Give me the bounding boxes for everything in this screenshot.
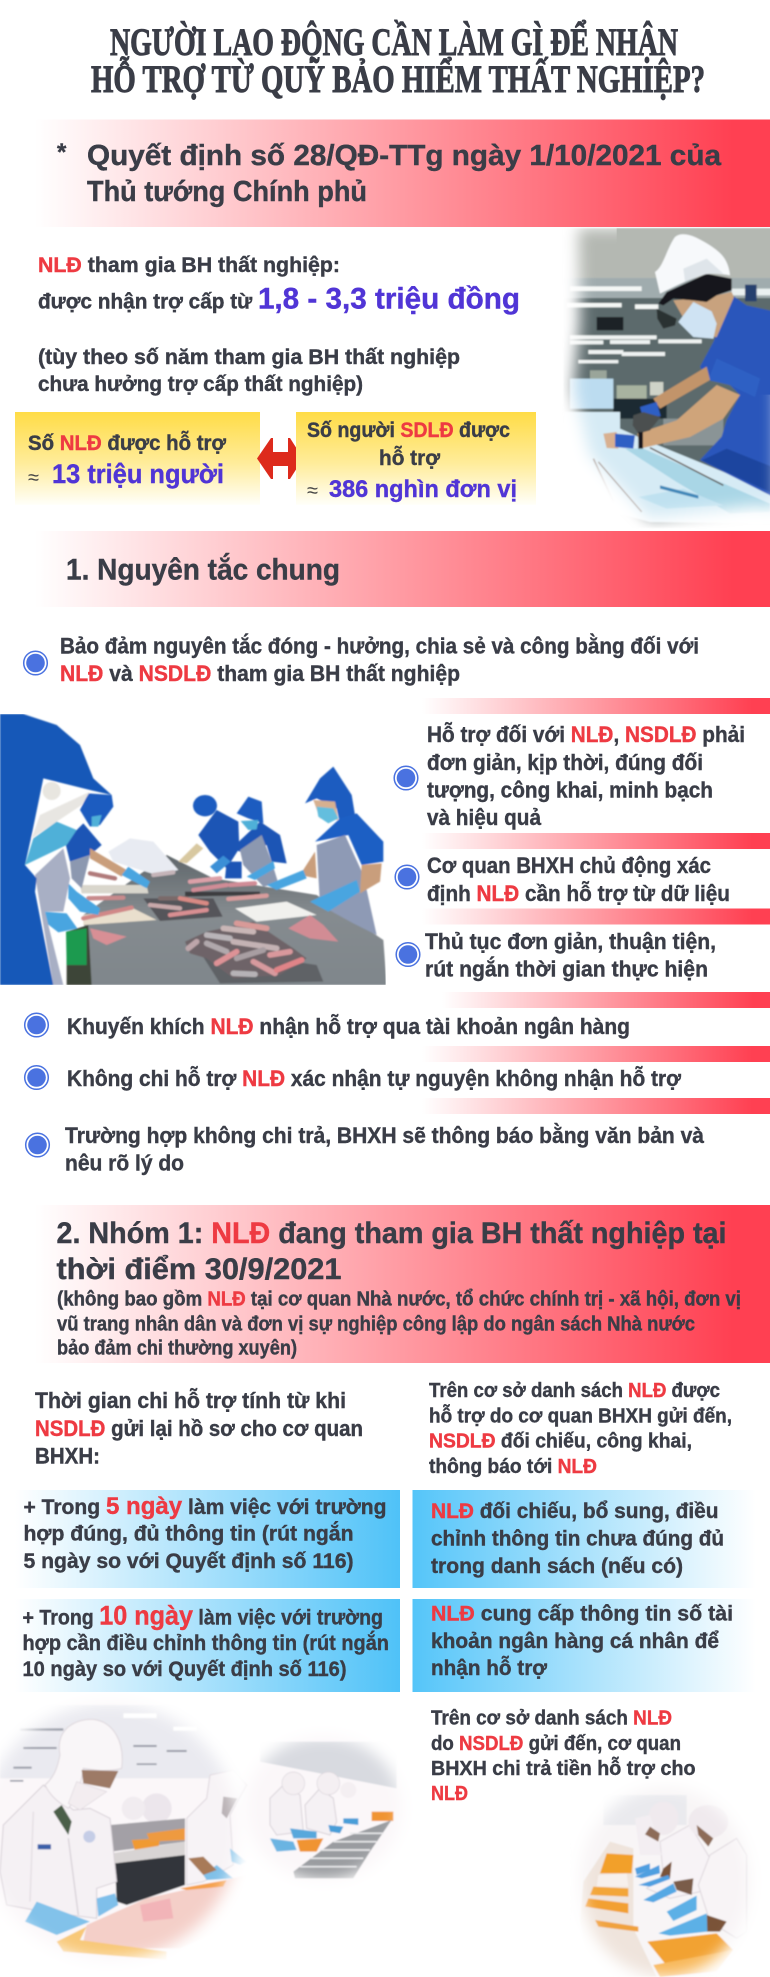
panel: provide bank account: NLĐ cung cấp thông tin số tài (431, 1602, 733, 1626)
list item: support must be simple: Hỗ trợ đối với NLĐ, NSDLĐ phải (427, 722, 745, 747)
list item: simple procedures: rút ngắn thời gian thực hiện (425, 956, 708, 982)
sub: hair and face (673, 292, 734, 337)
divider band (422, 908, 770, 924)
panel: provide bank account: nhận hỗ trợ (431, 1656, 547, 1680)
list item: support must be simple: và hiệu quả (427, 805, 542, 830)
text block: payment time: BHXH: (35, 1444, 100, 1468)
panel: within 10 days (15, 1599, 400, 1692)
panel: provide bank account (412, 1599, 756, 1692)
panel: decision heading band: Quyết định số 28/QĐ-TTg ngày 1/10/2021 của (87, 140, 722, 172)
text block: list sent by agency: NSDLĐ đối chiếu, công khai, (429, 1430, 692, 1452)
list item: social insurance agency (395, 853, 730, 906)
text block: NLD allowance: chưa hưởng trợ cấp thất nghiệp) (38, 373, 363, 396)
text block: agency pays: BHXH chi trả tiền hỗ trợ cho (431, 1756, 696, 1780)
sub: right workers (270, 1785, 303, 1835)
panel: section 2 heading band: bảo đảm chi thường xuyên) (57, 1338, 297, 1360)
photo: packing line workers (581, 1776, 748, 1977)
text block: agency pays: NLĐ (431, 1783, 468, 1805)
callout: number of workers supported: Số NLĐ được hỗ trợ (28, 431, 226, 455)
panel: section 2 heading band: (không bao gồm NLĐ tại cơ quan Nhà nước, tổ chức chính trị - xã hội, đơn vị (57, 1288, 741, 1310)
text block: NLD allowance: (tùy theo số năm tham gia BH thất nghiệp (38, 346, 460, 369)
text block: list sent by agency: Trên cơ sở danh sách NLĐ được (429, 1380, 720, 1402)
panel: within 5 days: hợp đúng, đủ thông tin (rút ngắn (24, 1522, 354, 1546)
text block: NLD allowance: NLĐ tham gia BH thất nghiệp: (38, 254, 340, 277)
callout: number of workers supported: 13 triệu người (52, 459, 224, 489)
photo: fish processing workers (0, 714, 387, 985)
text block: payment time: NSDLĐ gửi lại hồ sơ cho cơ quan (35, 1416, 363, 1441)
sub: main worker (0, 1785, 117, 1918)
list item: bank account: Khuyến khích NLĐ nhận hỗ trợ qua tài khoản ngân hàng (67, 1014, 630, 1039)
panel: decision heading band (35, 120, 770, 227)
sub: fish tray (83, 1875, 247, 1948)
list item: principle 1: NLĐ và NSDLĐ tham gia BH thất nghiệp (60, 661, 460, 686)
panel: within 5 days: + Trong 5 ngày làm việc với trường (24, 1493, 386, 1520)
list item: support must be simple: đơn giản, kịp thời, đúng đối (427, 750, 703, 775)
panel: section 1 heading band (35, 531, 770, 607)
list item: principle 1 (24, 634, 699, 686)
text block: payment time: Thời gian chi hỗ trợ tính từ khi (35, 1388, 346, 1413)
panel: section 2 heading band: vũ trang nhân dân và đơn vị sự nghiệp công lập do ngân sách Nhà nước (57, 1314, 695, 1336)
sub: worker 5 (305, 767, 355, 823)
callout: number of employers supported: hỗ trợ (379, 446, 440, 470)
text block: agency pays (431, 1708, 696, 1805)
callout: number of employers supported (296, 412, 536, 505)
sub: front orange basket (647, 1933, 733, 1966)
list item: principle 1: Bảo đảm nguyên tắc đóng - hưởng, chia sẻ và công bằng đối với (60, 634, 699, 658)
photo: seafood factory workers in white (0, 1705, 397, 1959)
sub: worker 3 (193, 795, 217, 816)
list item: social insurance agency: định NLĐ cần hỗ trợ từ dữ liệu (427, 881, 730, 906)
list item: simple procedures: Thủ tục đơn giản, thuận tiện, (425, 929, 716, 954)
divider band (422, 1046, 770, 1062)
panel: compare and adjust (412, 1490, 756, 1588)
callout: number of employers supported: ≈ (307, 480, 318, 502)
divider band (422, 698, 770, 714)
panel: decision heading band: * (57, 139, 67, 166)
callout: number of workers supported: ≈ (28, 467, 39, 489)
sub: blue gloves (635, 1863, 650, 1875)
panel: section 2 heading band (35, 1205, 770, 1363)
list item: support must be simple: tượng, công khai, minh bạch (427, 778, 713, 802)
panel: provide bank account: khoản ngân hàng cá nhân để (431, 1630, 719, 1653)
panel: compare and adjust: NLĐ đối chiếu, bổ sung, điều (431, 1500, 718, 1523)
sub: arms (653, 367, 710, 409)
divider band (422, 1098, 770, 1114)
list item: written notice: Trường hợp không chi trả, BHXH sẽ thông báo bằng văn bản và (65, 1123, 705, 1148)
sub: cutting table (563, 412, 770, 524)
photo: garment worker (563, 228, 770, 528)
sub: fish piles (185, 922, 307, 978)
text block: agency pays: Trên cơ sở danh sách NLĐ (431, 1708, 672, 1730)
panel: compare and adjust: chỉnh thông tin chưa đúng đủ (431, 1528, 724, 1550)
text block: payment time (35, 1388, 363, 1468)
text block: NLD allowance (38, 254, 520, 396)
list item: written notice (26, 1123, 705, 1176)
sub: work table (83, 855, 387, 985)
text block: list sent by agency (429, 1380, 732, 1478)
panel: within 10 days: 10 ngày so với Quyết định số 116) (22, 1658, 346, 1681)
list item: written notice: nêu rõ lý do (65, 1150, 184, 1176)
panel: section 1 heading band: 1. Nguyên tắc chung (66, 552, 340, 586)
panel: section 2 heading band: 2. Nhóm 1: NLĐ đang tham gia BH thất nghiệp tại (56, 1217, 726, 1250)
panel: compare and adjust: trong danh sách (nếu có) (431, 1555, 683, 1578)
sub: dark machine (115, 1855, 185, 1905)
sub: ceiling (0, 1705, 240, 1778)
list item: voluntary refusal: Không chi hỗ trợ NLĐ xác nhận tự nguyện không nhận hỗ trợ (67, 1066, 681, 1091)
text block: NLD allowance: được nhận trợ cấp từ 1,8 - 3,3 triệu đồng (38, 282, 520, 316)
panel: within 5 days (15, 1490, 400, 1588)
title (91, 18, 705, 101)
sub: worker 2 (80, 793, 113, 827)
callout: number of employers supported: 386 nghìn đơn vị (329, 476, 517, 503)
text block: list sent by agency: hỗ trợ do cơ quan BHXH gửi đến, (429, 1404, 732, 1428)
sub: conveyor (293, 1820, 392, 1878)
divider band (422, 833, 770, 849)
panel: within 10 days: hợp cần điều chỉnh thông tin (rút ngắn (22, 1631, 389, 1655)
sub: hat (655, 234, 730, 294)
sub: workers (647, 1825, 710, 1898)
list item: simple procedures (396, 929, 716, 982)
panel: decision heading band: Thủ tướng Chính phủ (87, 176, 367, 208)
text block: list sent by agency: thông báo tới NLĐ (429, 1456, 597, 1478)
sub: second worker (186, 1774, 236, 1886)
panel: section 2 heading band: thời điểm 30/9/2021 (56, 1253, 342, 1286)
sub: shirt (700, 296, 770, 499)
sub: foreground worker (35, 848, 70, 985)
list item: social insurance agency: Cơ quan BHXH chủ động xác (427, 853, 711, 878)
sub: far line of workers (144, 1794, 172, 1822)
divider band (442, 992, 770, 1008)
sub: worker 4 (237, 797, 263, 823)
callout: number of employers supported: Số người SDLĐ được (307, 419, 510, 442)
sub: counter (580, 1842, 657, 1977)
list item: support must be simple (394, 722, 745, 830)
callout: number of workers supported (15, 412, 260, 505)
panel: within 5 days: 5 ngày so với Quyết định số 116) (24, 1550, 354, 1573)
sub: orange trays (600, 1853, 633, 1873)
sub: face mask (678, 302, 717, 339)
text block: agency pays: do NSDLĐ gửi đến, cơ quan (431, 1733, 681, 1755)
panel: within 10 days: + Trong 10 ngày làm việc với trường (22, 1600, 383, 1630)
arrow: double headed (257, 438, 303, 479)
